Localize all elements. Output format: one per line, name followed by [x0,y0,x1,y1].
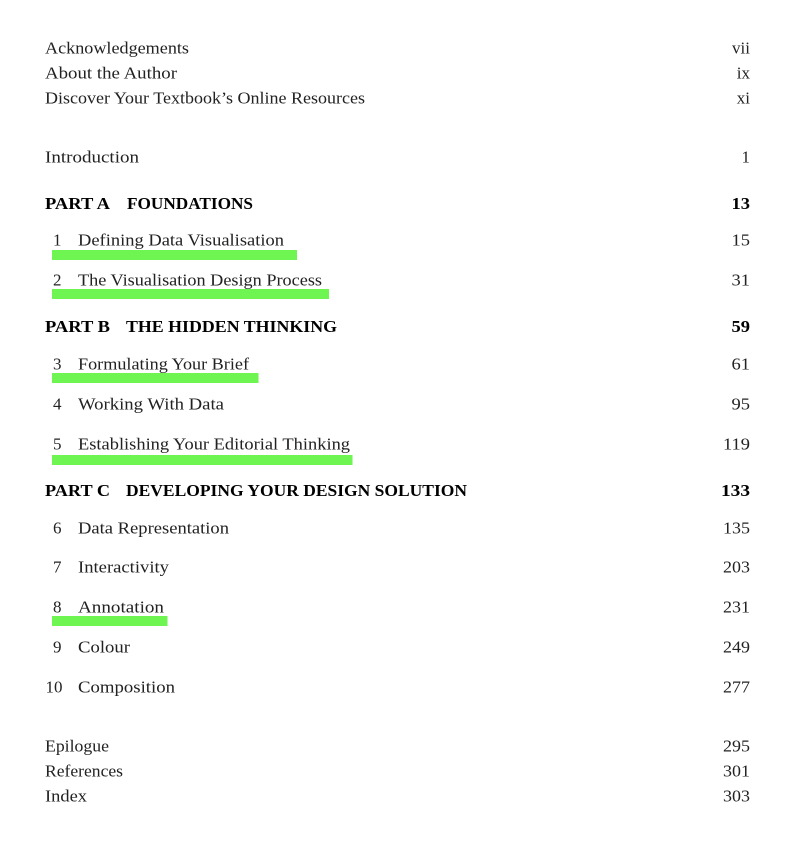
chapter 5 with highlight: 119 [723,434,750,454]
chapter 8 with highlight: Annotation [78,598,165,616]
chapter 3 with highlight: 3 [53,354,62,374]
chapter 9: 249 [723,638,750,656]
chapter 3 with highlight: 61 [732,354,750,374]
back matter entries [45,736,750,806]
chapter 4: 95 [732,394,750,414]
part B heading: 59 [732,317,750,336]
back matter entries: Epilogue [45,736,109,756]
chapter 2 with highlight: The Visualisation Design Process [78,270,322,290]
part A heading: FOUNDATIONS [127,194,253,213]
chapter 6 [53,518,750,538]
part B heading: PART B [45,317,110,336]
part B heading [45,317,750,336]
chapter 9 [53,638,750,656]
chapter 9: Colour [78,638,130,656]
front matter entries: vii [732,38,750,58]
chapter 5 with highlight: 5 [53,434,62,454]
part C heading: 133 [721,481,750,500]
chapter 1 with highlight: 15 [732,230,750,250]
chapter 10 [46,678,751,696]
part B heading: THE HIDDEN THINKING [126,317,337,336]
chapter 2 with highlight: 31 [732,270,750,290]
chapter 2 with highlight: 2 [53,270,62,290]
chapter 1 with highlight: 1 [53,230,62,250]
chapter 7: 7 [53,558,62,576]
chapter 6: Data Representation [78,518,230,538]
introduction entry: 1 [742,148,750,166]
chapter 10: 10 [46,678,62,696]
part C heading: PART C [45,481,110,500]
introduction entry [45,148,750,166]
chapter 5 with highlight: Establishing Your Editorial Thinking [78,434,351,454]
front matter entries: Discover Your Textbook’s Online Resources [45,88,365,108]
chapter 8 with highlight: 231 [723,598,750,616]
front matter entries: Acknowledgements [45,38,189,58]
introduction entry: Introduction [45,148,140,166]
part C heading: DEVELOPING YOUR DESIGN SOLUTION [126,481,467,500]
chapter 7: Interactivity [78,558,170,576]
front matter entries: xi [737,88,750,108]
chapter 1 with highlight [52,230,750,260]
chapter 6: 6 [53,518,62,538]
chapter 4: Working With Data [78,394,224,414]
chapter 7: 203 [723,558,750,576]
chapter 9: 9 [53,638,62,656]
part A heading: PART A [45,194,110,213]
back matter entries: 295 [723,736,750,756]
chapter 4: 4 [53,394,62,414]
part A heading [45,194,750,213]
chapter 4 [53,394,750,414]
back matter entries: Index [45,786,88,806]
front matter entries: About the Author [45,64,177,82]
back matter entries: References [45,762,123,780]
chapter 10: 277 [723,678,751,696]
back matter entries: 303 [723,786,750,806]
front matter entries [45,38,750,108]
part A heading: 13 [732,194,750,213]
chapter 7 [53,558,750,576]
chapter 2 with highlight [52,270,750,299]
chapter 5 with highlight [52,434,750,465]
part C heading [45,481,750,500]
chapter 3 with highlight: Formulating Your Brief [78,354,249,374]
front matter entries: ix [737,64,750,82]
chapter 6: 135 [723,518,750,538]
chapter 8 with highlight: 8 [53,598,62,616]
chapter 1 with highlight: Defining Data Visualisation [78,230,285,250]
back matter entries: 301 [723,762,750,780]
chapter 10: Composition [78,678,176,696]
chapter 8 with highlight [52,598,750,626]
chapter 3 with highlight [52,354,750,383]
